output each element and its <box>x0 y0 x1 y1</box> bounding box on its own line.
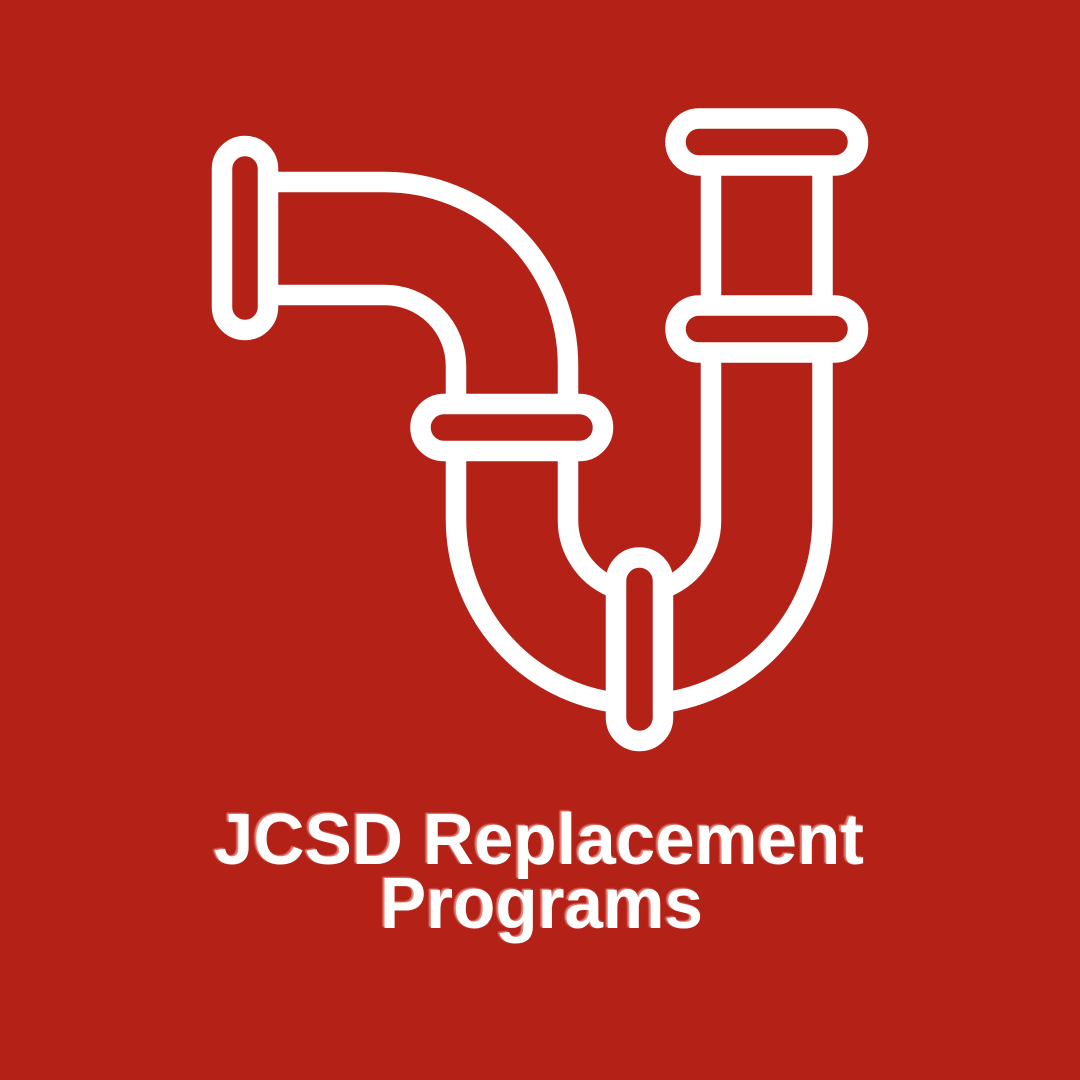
middle coupling flange <box>420 404 603 451</box>
upper elbow pipe <box>268 182 568 404</box>
top right flange <box>676 118 858 166</box>
title <box>214 800 864 944</box>
title line 1: JCSD Replacement <box>214 800 864 880</box>
title line 2: Programs <box>380 864 703 944</box>
U-bend pipe <box>456 352 822 703</box>
second right flange <box>676 306 858 352</box>
bottom trap flange <box>616 558 663 741</box>
right riser pipe segment <box>711 165 822 305</box>
left wall flange <box>222 146 268 330</box>
icon: drain pipe <box>222 118 858 741</box>
